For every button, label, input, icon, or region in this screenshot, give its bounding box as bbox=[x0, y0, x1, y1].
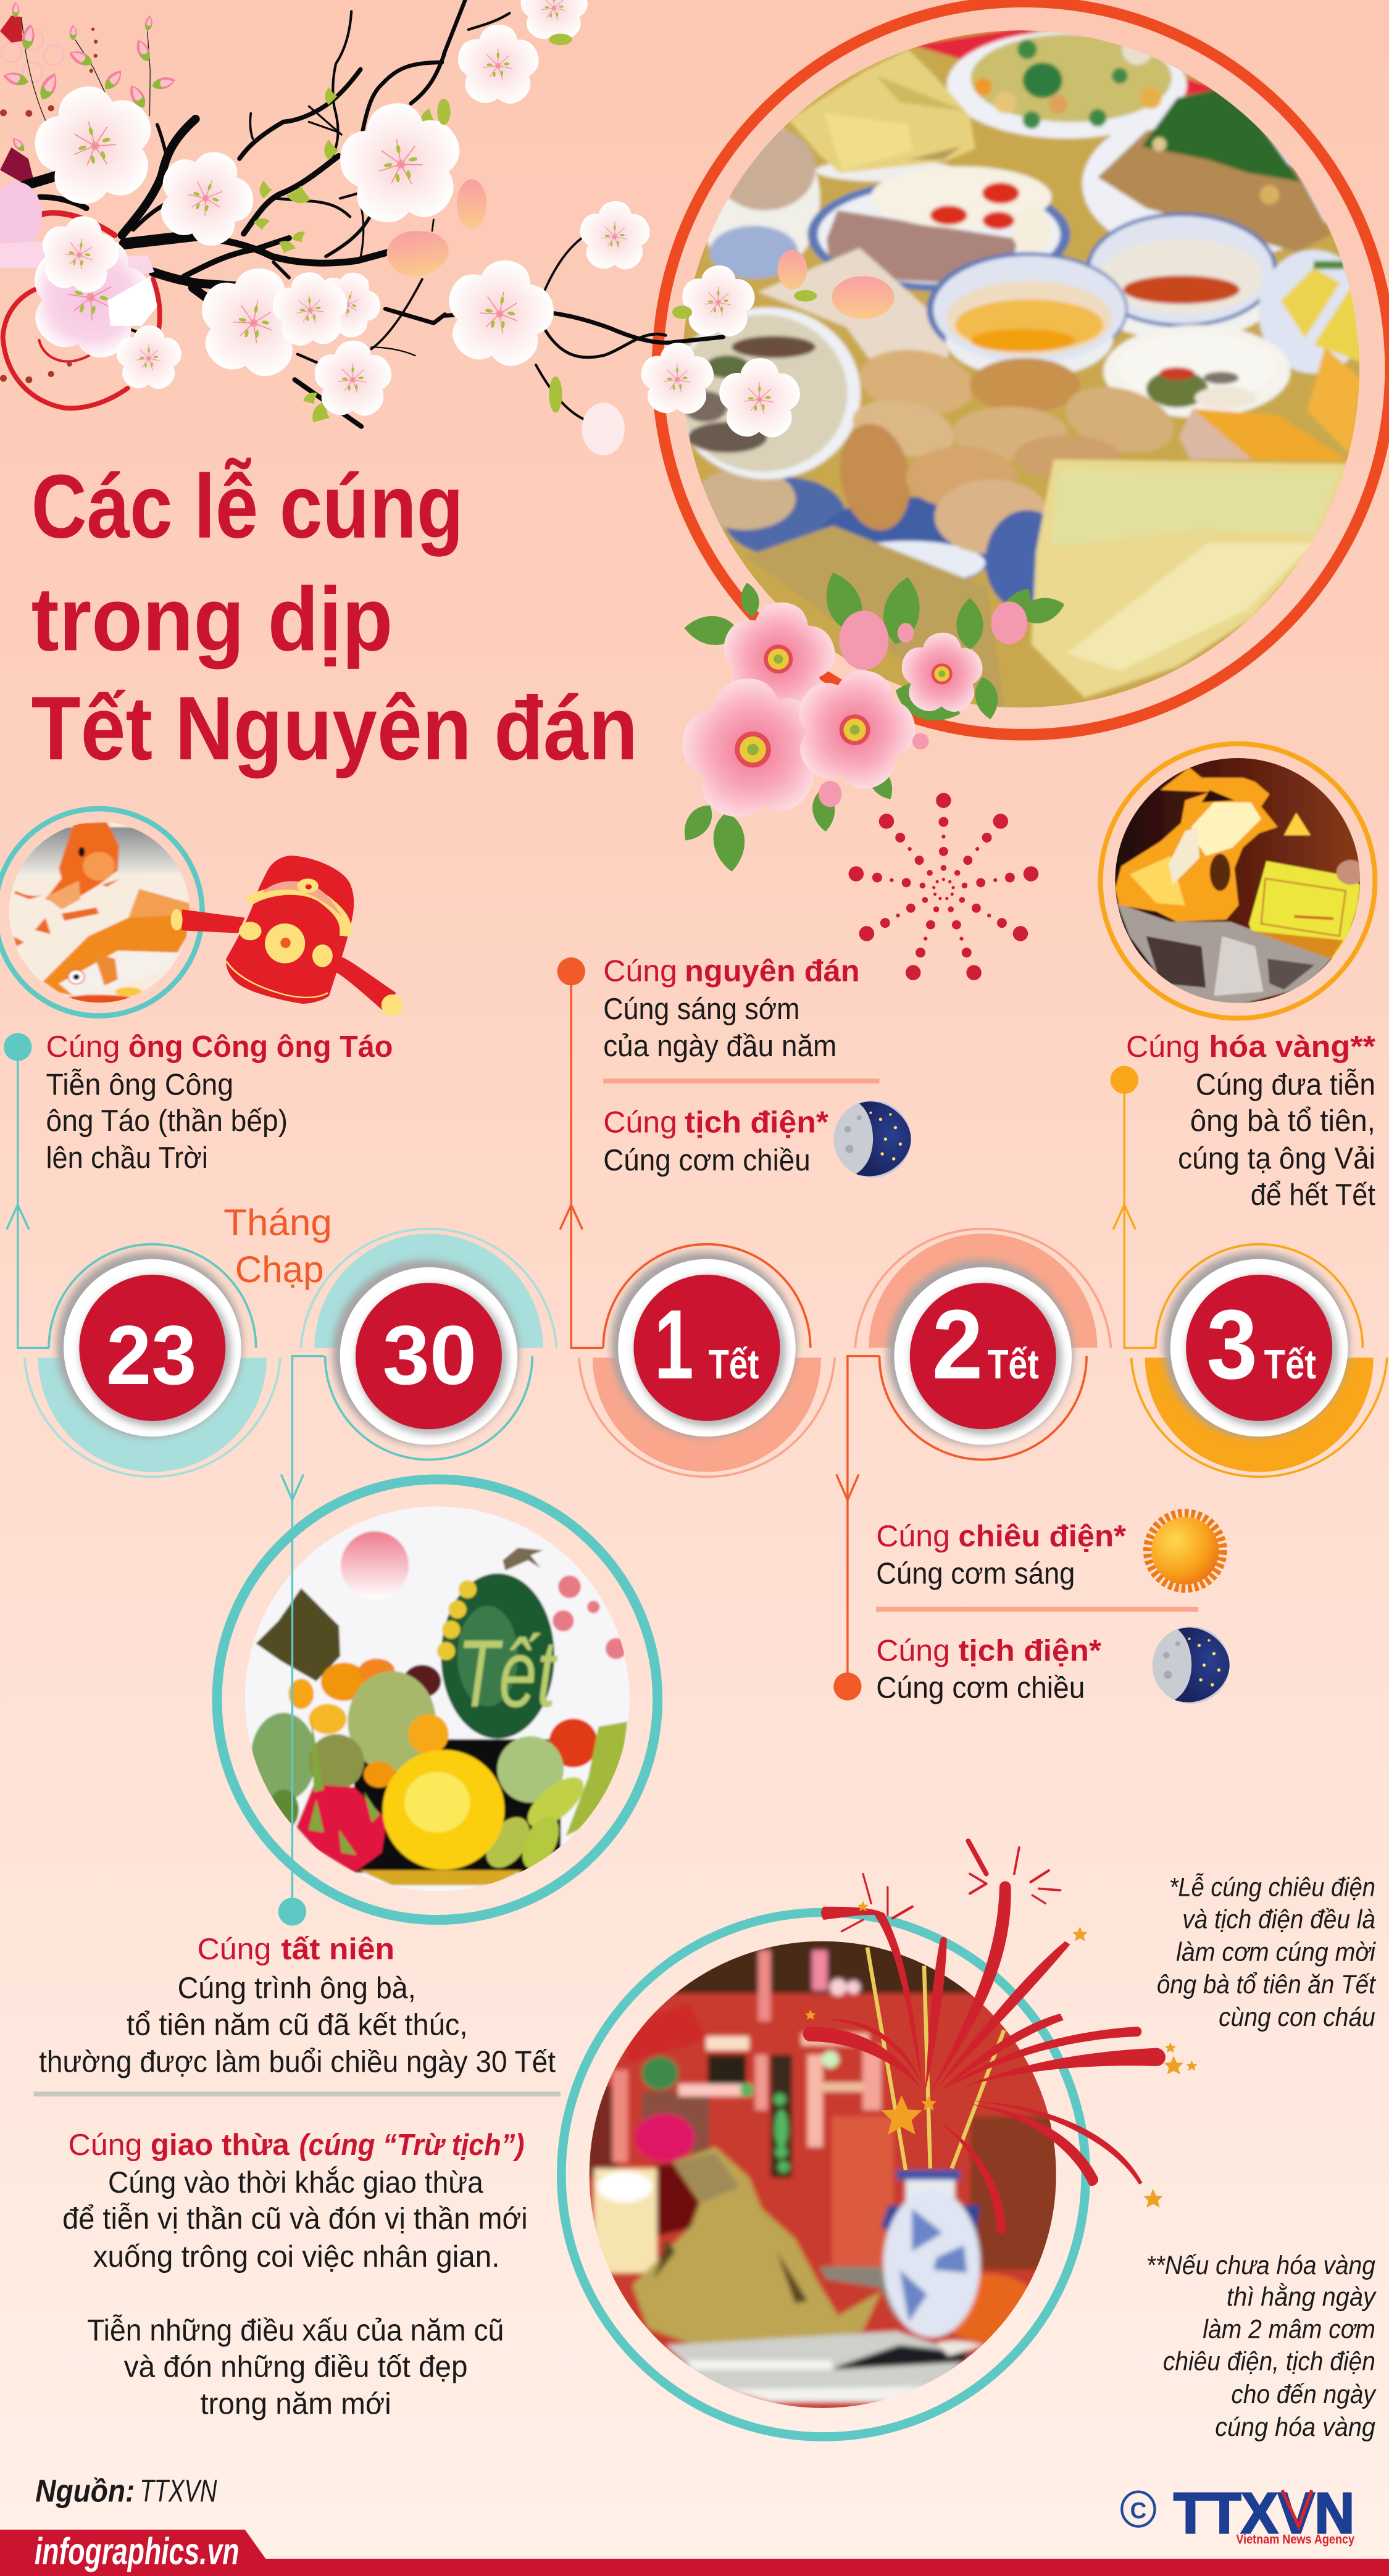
date circle: 1 Tết: 1 bbox=[654, 1289, 694, 1399]
text block: Cúng nguyên đán: tịch điện* bbox=[685, 1106, 829, 1140]
date circle: 3 Tết: Tết bbox=[1264, 1342, 1316, 1388]
footnote: hóa vàng: chiêu điện, tịch điện bbox=[1163, 2347, 1375, 2377]
text block: Cúng giao thừa: Cúng bbox=[69, 2128, 142, 2162]
text block: Cúng chiêu điện and tịch điện: chiêu điện* bbox=[958, 1519, 1127, 1553]
connector: 2 Tết line with arrow bbox=[833, 1356, 880, 1701]
photo: fruit tray with teal ring: Tết bbox=[457, 1620, 558, 1727]
text block: Cúng chiêu điện and tịch điện: tịch điện* bbox=[958, 1634, 1102, 1668]
black branches bbox=[24, 11, 445, 427]
heading and text: Cúng ông Công ông Táo: ông Công ông Táo bbox=[128, 1030, 393, 1064]
text block: Cúng hóa vàng: cúng tạ ông Vải bbox=[1178, 1141, 1375, 1175]
footer bar: infographics.vn bbox=[35, 2530, 239, 2572]
text block: Cúng giao thừa: xuống trông coi việc nhân gian. bbox=[93, 2240, 499, 2274]
logo: TTXVN: C bbox=[1130, 2497, 1146, 2523]
text block: Cúng nguyên đán bbox=[603, 954, 880, 1177]
text block: Cúng nguyên đán: Cúng bbox=[603, 1106, 677, 1140]
date circle: 2 Tết: 2 bbox=[932, 1289, 983, 1399]
text block: Cúng chiêu điện and tịch điện: Cúng bbox=[876, 1634, 950, 1668]
photo: fruit tray with teal ring bbox=[217, 1479, 657, 1925]
photo: goldfish with teal ring bbox=[0, 809, 203, 1016]
icon: red firework dots bbox=[848, 793, 1040, 982]
text block: Cúng giao thừa: để tiễn vị thần cũ và đón vị thần mới bbox=[62, 2202, 528, 2236]
date circle: 1 Tết bbox=[579, 1244, 835, 1477]
text block: Cúng giao thừa bbox=[62, 2128, 528, 2421]
label: Tháng Chạp: Chạp bbox=[235, 1249, 324, 1290]
icon: moon bbox=[834, 1101, 911, 1178]
text block: Cúng giao thừa: giao thừa bbox=[151, 2128, 290, 2162]
date circle: 23: 23 bbox=[106, 1308, 196, 1402]
text block: Cúng giao thừa: và đón những điều tốt đẹp bbox=[124, 2349, 468, 2383]
text block: Cúng nguyên đán: Cúng bbox=[603, 954, 677, 988]
icon: sun bbox=[1148, 1513, 1223, 1589]
title: trong dịp bbox=[31, 569, 393, 670]
logo: TTXVN: Vietnam News Agency bbox=[1236, 2532, 1354, 2547]
footnote: chiêu điện and tịch điện: và tịch điện đều là bbox=[1182, 1904, 1375, 1934]
firework streaks over altar bbox=[803, 1881, 1166, 2234]
source: TTXVN bbox=[140, 2474, 217, 2509]
text block: Cúng nguyên đán: Cúng sáng sớm bbox=[603, 992, 799, 1026]
heading and text: Cúng ông Công ông Táo bbox=[46, 1030, 393, 1175]
source bbox=[35, 2474, 217, 2509]
blossoms: right extension bbox=[386, 0, 895, 456]
blossoms bbox=[0, 71, 479, 422]
photo: altar with teal ring bbox=[561, 1912, 1086, 2436]
footnote: hóa vàng: làm 2 mâm cơm bbox=[1203, 2315, 1375, 2345]
bud stems bbox=[21, 17, 150, 123]
text block: Cúng giao thừa: Tiễn những điều xấu của năm cũ bbox=[87, 2314, 504, 2348]
date circle: 1 Tết: Tết bbox=[709, 1342, 759, 1388]
text block: Cúng tất niên: Cúng trình ông bà, bbox=[178, 1971, 416, 2005]
connector: 30 teal line with arrow bbox=[281, 1356, 324, 1500]
buds bbox=[2, 2, 177, 154]
label: Tháng Chạp: Tháng bbox=[223, 1202, 332, 1243]
footnote: hóa vàng: cúng hóa vàng bbox=[1215, 2412, 1375, 2442]
text block: Cúng tất niên: Cúng bbox=[198, 1932, 271, 1966]
heading and text: Cúng ông Công ông Táo: lên chầu Trời bbox=[46, 1141, 208, 1175]
text block: Cúng hóa vàng: hóa vàng** bbox=[1209, 1030, 1376, 1064]
text block: Cúng tất niên: thường được làm buổi chiều ngày 30 Tết bbox=[39, 2045, 556, 2079]
footnote: chiêu điện and tịch điện: cùng con cháu bbox=[1219, 2003, 1375, 2032]
text block: Cúng nguyên đán: của ngày đầu năm bbox=[603, 1029, 836, 1063]
icon: Kitchen God hat bbox=[171, 856, 403, 1016]
date circle: 2 Tết bbox=[855, 1229, 1111, 1459]
date circle: 3 Tết bbox=[1131, 1244, 1387, 1477]
text block: Cúng giao thừa: (cúng “Trừ tịch”) bbox=[299, 2128, 524, 2162]
source: Nguồn: bbox=[35, 2474, 135, 2509]
footnote: hóa vàng bbox=[1146, 2251, 1377, 2442]
branch: right extension bbox=[444, 0, 724, 419]
heading and text: Cúng ông Công ông Táo: Tiễn ông Công bbox=[46, 1067, 233, 1101]
decoration: faint outline flower and dots bbox=[1, 29, 64, 82]
footer bar bbox=[0, 2530, 1389, 2576]
date circle: 3 Tết: 3 bbox=[1206, 1289, 1258, 1399]
text block: Cúng tất niên: tất niên bbox=[281, 1932, 394, 1966]
footnote: hóa vàng: thì hằng ngày bbox=[1227, 2282, 1377, 2312]
title bbox=[31, 456, 638, 779]
date circle: 23 bbox=[25, 1244, 280, 1477]
connector: 3 Tết line with arrow bbox=[1111, 1066, 1156, 1348]
date circle: 2 Tết: Tết bbox=[987, 1342, 1039, 1388]
text block: Cúng tất niên bbox=[34, 1932, 561, 2096]
photo: food tray with orange ring bbox=[657, 2, 1389, 735]
heading and text: Cúng ông Công ông Táo: ông Táo (thần bếp) bbox=[46, 1104, 288, 1138]
icon: dark buds bbox=[0, 15, 34, 181]
label: Tháng Chạp bbox=[223, 1202, 332, 1290]
date circle: 30 bbox=[301, 1229, 557, 1459]
firework tips: small red rays bbox=[841, 1841, 1060, 1932]
text block: Cúng chiêu điện and tịch điện bbox=[876, 1519, 1198, 1705]
text block: Cúng hóa vàng: để hết Tết bbox=[1251, 1178, 1375, 1212]
footnote: chiêu điện and tịch điện: làm cơm cúng mời bbox=[1176, 1938, 1376, 1967]
footnote: chiêu điện and tịch điện bbox=[1157, 1873, 1377, 2032]
text block: Cúng chiêu điện and tịch điện: Cúng cơm chiều bbox=[876, 1671, 1085, 1705]
text block: Cúng hóa vàng: Cúng đưa tiễn bbox=[1196, 1067, 1375, 1101]
text block: Cúng hóa vàng bbox=[1126, 1030, 1376, 1212]
decoration: red swirl bbox=[3, 213, 160, 408]
connector: 23 teal line with arrow bbox=[4, 1033, 49, 1348]
text block: Cúng chiêu điện and tịch điện: Cúng cơm sáng bbox=[876, 1557, 1075, 1591]
text block: Cúng nguyên đán: Cúng cơm chiều bbox=[603, 1143, 811, 1177]
text block: Cúng hóa vàng: Cúng bbox=[1126, 1030, 1200, 1064]
footnote: hóa vàng: cho đến ngày bbox=[1231, 2380, 1377, 2409]
logo: TTXVN: TTXVN bbox=[1174, 2481, 1354, 2545]
text block: Cúng hóa vàng: ông bà tổ tiên, bbox=[1190, 1104, 1375, 1138]
title: Các lễ cúng bbox=[31, 456, 464, 557]
connector: 1 Tết line with arrow bbox=[557, 957, 603, 1348]
icon: moon bbox=[1153, 1627, 1230, 1704]
flower cluster under food photo bbox=[664, 567, 1068, 873]
text block: Cúng giao thừa: Cúng vào thời khắc giao thừa bbox=[108, 2165, 483, 2199]
branch and blossoms: top-left peach branch bbox=[0, 2, 479, 428]
date circle: 30: 30 bbox=[383, 1308, 477, 1402]
photo: burning votive paper with orange ring bbox=[1101, 744, 1375, 1019]
text block: Cúng chiêu điện and tịch điện: Cúng bbox=[876, 1519, 950, 1553]
text block: Cúng tất niên: tổ tiên năm cũ đã kết thúc, bbox=[127, 2007, 468, 2041]
stars: orange sparks bbox=[805, 1901, 1197, 2207]
green leaves bbox=[106, 87, 439, 428]
text block: Cúng nguyên đán: nguyên đán bbox=[685, 954, 860, 988]
heading and text: Cúng ông Công ông Táo: Cúng bbox=[46, 1030, 120, 1064]
title: Tết Nguyên đán bbox=[31, 678, 638, 779]
decoration: brown dots bbox=[0, 28, 115, 383]
text block: Cúng giao thừa: trong năm mới bbox=[200, 2387, 391, 2421]
